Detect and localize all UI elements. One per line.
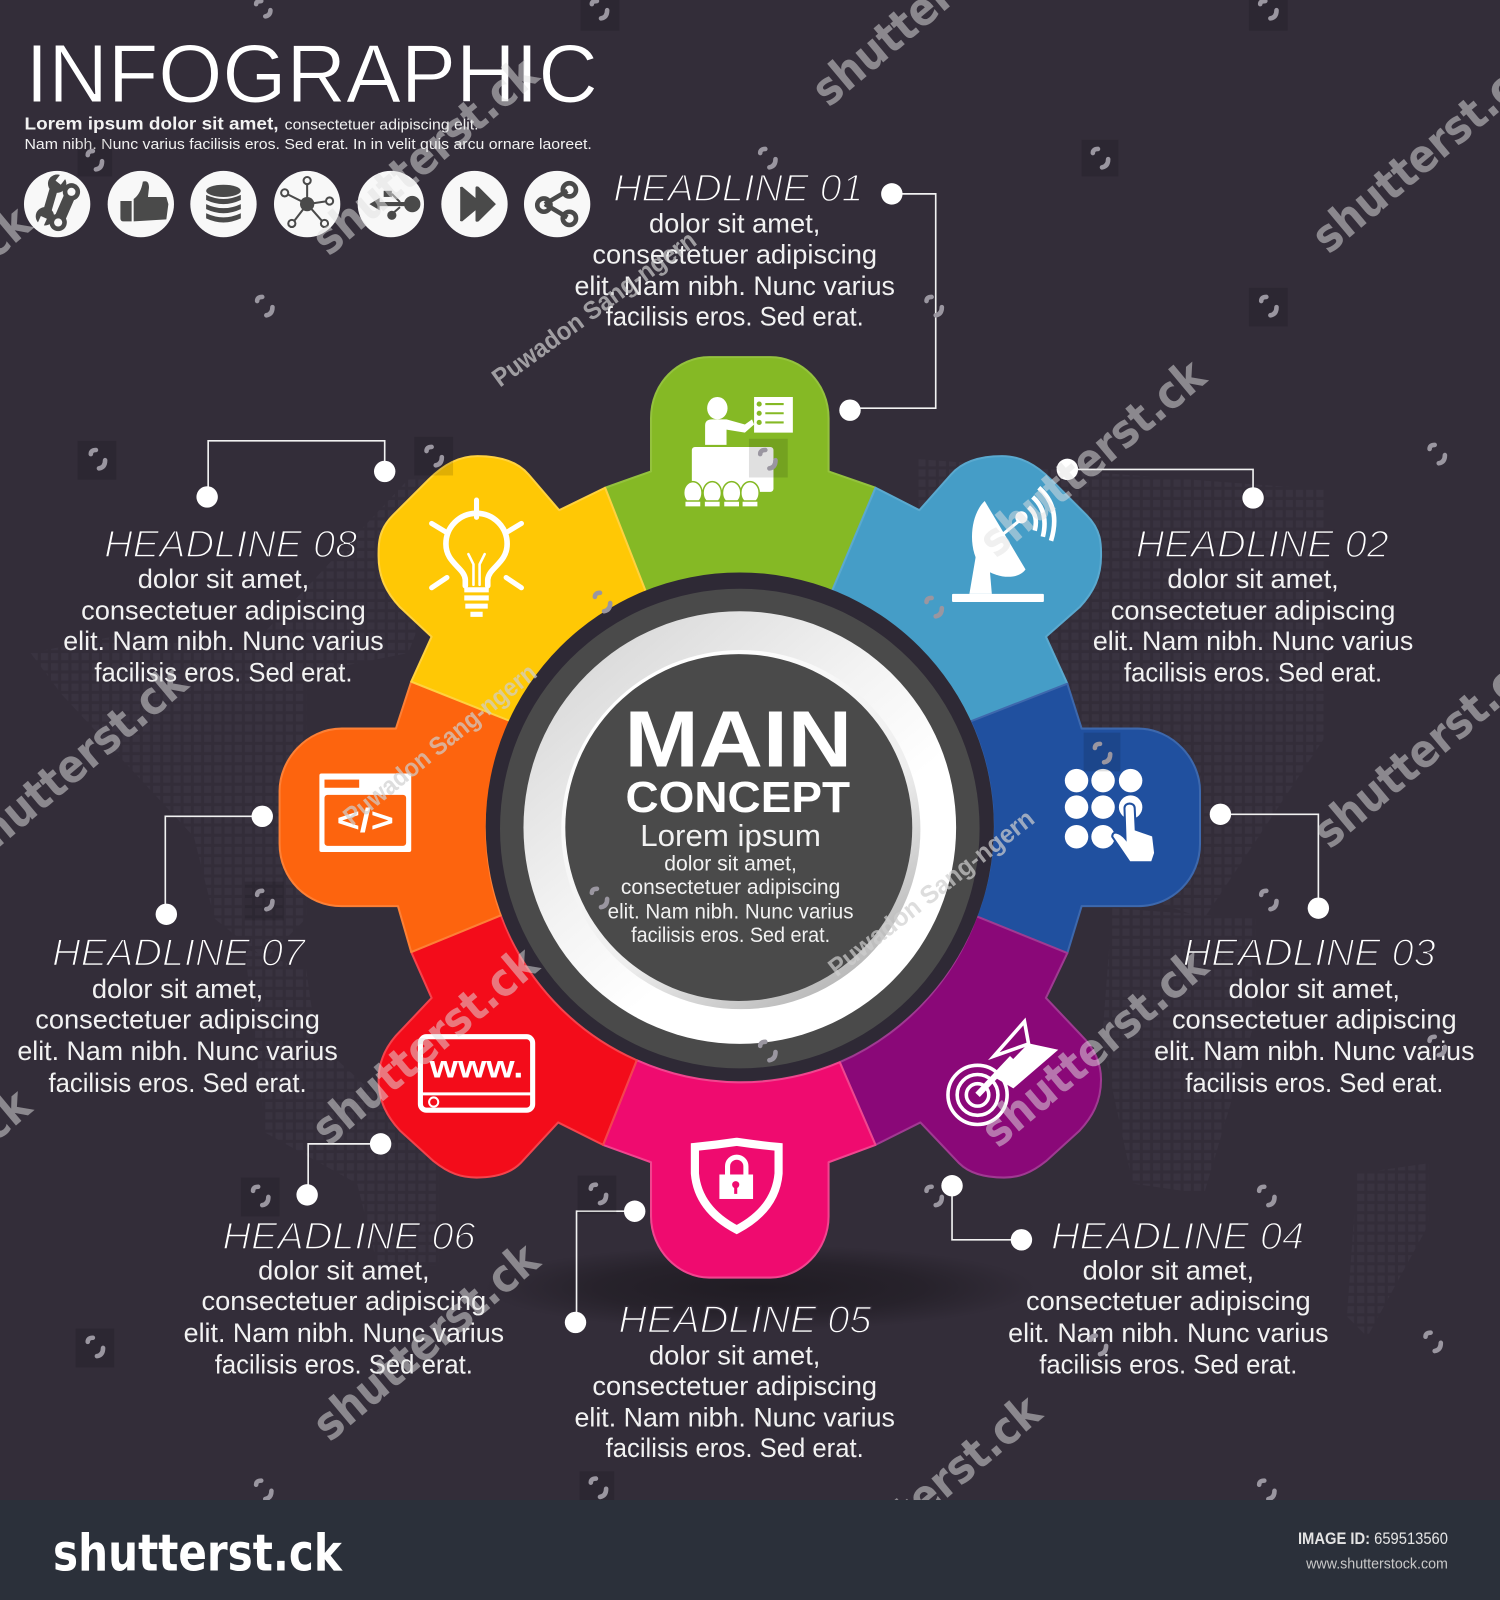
text block: headline 04: elit. Nam nibh. Nunc varius — [1008, 1318, 1329, 1348]
gear shadow — [485, 1245, 1036, 1331]
text block: headline 05: dolor sit amet, — [649, 1340, 820, 1370]
icon: share — [524, 171, 590, 237]
text block: headline 07 — [17, 931, 338, 1098]
text block: headline 07: dolor sit amet, — [92, 974, 263, 1004]
segment 01 green — [605, 357, 876, 592]
main concept text: CONCEPT — [626, 773, 850, 822]
text block: headline 06: elit. Nam nibh. Nunc varius — [184, 1318, 504, 1348]
text block: headline 03: elit. Nam nibh. Nunc varius — [1154, 1036, 1474, 1066]
icon: thumbs up — [108, 171, 174, 237]
subtitle text: Lorem ipsum dolor sit amet, — [24, 114, 279, 134]
text block: headline 01: consectetuer adipiscing — [592, 239, 877, 269]
icon: tools — [24, 171, 90, 237]
footer bar — [0, 1500, 1500, 1600]
watermarks: Puwadon Sang-ngern — [338, 659, 542, 831]
text block: headline 05: facilisis eros. Sed erat. — [606, 1433, 864, 1463]
text block: headline 02: HEADLINE 02 — [1136, 523, 1389, 565]
icon: database — [190, 171, 257, 237]
connector 01 — [839, 183, 936, 421]
text block: headline 03: dolor sit amet, — [1229, 974, 1400, 1004]
subtitle text: Nam nibh. Nunc varius facilisis eros. Sed erat. In in velit quis arcu ornare laoreet. — [24, 136, 592, 153]
watermarks: shutterst.ck — [968, 347, 1217, 568]
text block: headline 04: HEADLINE 04 — [1051, 1215, 1304, 1257]
main concept text: facilisis eros. Sed erat. — [631, 924, 830, 947]
subtitle text — [24, 114, 592, 153]
icon row — [24, 171, 590, 237]
text block: headline 02: dolor sit amet, — [1167, 564, 1339, 594]
watermarks: Puwadon Sang-ngern — [487, 226, 702, 393]
watermarks: shutterst.ck — [970, 937, 1219, 1157]
text block: headline 02: elit. Nam nibh. Nunc varius — [1093, 626, 1413, 656]
connector 08 — [196, 441, 395, 508]
text block: headline 04: consectetuer adipiscing — [1026, 1286, 1311, 1316]
title: INFOGRAPHIC — [26, 27, 598, 120]
icon: code window: </> — [337, 803, 394, 840]
text block: headline 04 — [1008, 1215, 1329, 1379]
text block: headline 03: facilisis eros. Sed erat. — [1185, 1068, 1443, 1098]
connector 02 — [1057, 459, 1264, 509]
watermarks: shutterst.ck — [804, 1383, 1052, 1600]
connector 03 — [1210, 804, 1329, 919]
text block: headline 06: consectetuer adipiscing — [202, 1286, 486, 1316]
icon: code window — [319, 773, 411, 852]
panel: gear with eight coloured segments — [280, 357, 1200, 1278]
text block: headline 06: dolor sit amet, — [258, 1256, 430, 1286]
text block: headline 02 — [1093, 523, 1413, 688]
text block: headline 05: elit. Nam nibh. Nunc varius — [574, 1403, 895, 1433]
text block: headline 05 — [574, 1299, 895, 1463]
subtitle text: consectetuer adipiscing elit. — [285, 118, 479, 134]
connector 07 — [156, 806, 273, 925]
icon: shield with padlock — [695, 1142, 779, 1230]
text block: headline 03 — [1154, 931, 1474, 1098]
segment 02 blue — [832, 456, 1101, 721]
watermarks: shutterst.ck — [301, 935, 549, 1155]
text block: headline 07: HEADLINE 07 — [52, 931, 307, 973]
footer logo: shutterst.ck — [53, 1524, 343, 1583]
text block: headline 06 — [184, 1215, 504, 1379]
icon: target and arrow — [948, 1021, 1057, 1124]
text block: headline 03: HEADLINE 03 — [1183, 931, 1436, 973]
connector 06 — [296, 1133, 391, 1206]
main concept text: elit. Nam nibh. Nunc varius — [608, 900, 854, 923]
text block: headline 01: facilisis eros. Sed erat. — [606, 302, 864, 332]
icon: light bulb — [432, 500, 521, 614]
text block: headline 01: elit. Nam nibh. Nunc varius — [574, 271, 895, 301]
icon: www browser — [420, 1037, 533, 1110]
text block: headline 08: consectetuer adipiscing — [81, 595, 366, 625]
text block: headline 02: consectetuer adipiscing — [1111, 595, 1395, 625]
text block: headline 06: facilisis eros. Sed erat. — [215, 1349, 473, 1379]
segment 06 red — [379, 915, 637, 1178]
segment 04 purple — [840, 916, 1101, 1178]
segment 05 pink — [603, 1060, 876, 1278]
main concept text: Lorem ipsum — [640, 819, 821, 853]
connector 05 — [565, 1201, 645, 1333]
text block: headline 08: facilisis eros. Sed erat. — [94, 658, 353, 688]
text block: headline 01: HEADLINE 01 — [613, 167, 863, 209]
icon: fast forward — [441, 171, 508, 237]
text block: headline 05: consectetuer adipiscing — [592, 1371, 877, 1401]
text block: headline 03: consectetuer adipiscing — [1172, 1005, 1457, 1035]
icon: keypad with pointing hand — [1065, 769, 1155, 862]
text block: headline 08: dolor sit amet, — [138, 564, 309, 594]
segment 08 yellow — [379, 456, 646, 721]
text block: headline 07: facilisis eros. Sed erat. — [48, 1068, 307, 1098]
watermarks: Puwadon Sang-ngern — [823, 804, 1040, 982]
text block: headline 05: HEADLINE 05 — [618, 1299, 872, 1341]
text block: headline 06: HEADLINE 06 — [222, 1215, 476, 1257]
text block: headline 07: elit. Nam nibh. Nunc varius — [17, 1036, 338, 1066]
main concept text: dolor sit amet, — [664, 852, 797, 875]
connector 04 — [941, 1175, 1032, 1251]
text block: headline 08: elit. Nam nibh. Nunc varius — [63, 626, 384, 656]
text block: headline 07: consectetuer adipiscing — [35, 1005, 320, 1035]
central hub — [486, 572, 994, 1081]
segment 03 navy — [970, 684, 1200, 953]
text block: headline 08 — [63, 523, 384, 688]
main concept text: MAIN — [624, 694, 852, 783]
footer image id: IMAGE ID: 659513560 — [1298, 1530, 1448, 1548]
text block: headline 01: dolor sit amet, — [649, 209, 820, 239]
watermarks: shutterst.ck — [301, 45, 549, 266]
footer url: www.shutterstock.com — [1305, 1556, 1448, 1572]
text block: headline 02: facilisis eros. Sed erat. — [1124, 658, 1382, 688]
icon: usb symbol — [358, 171, 424, 237]
text block: headline 04: dolor sit amet, — [1083, 1256, 1254, 1286]
icon: presenter and audience — [684, 397, 793, 507]
segment 07 orange — [280, 682, 511, 952]
text block: headline 08: HEADLINE 08 — [104, 523, 357, 565]
icon: satellite dish — [952, 488, 1054, 602]
text block: headline 04: facilisis eros. Sed erat. — [1039, 1349, 1297, 1379]
icon: www browser: www. — [428, 1049, 523, 1085]
watermarks: shutterst.ck — [302, 1231, 550, 1451]
icon: network hub — [274, 171, 340, 237]
main concept text — [608, 694, 854, 947]
main concept text: consectetuer adipiscing — [621, 876, 840, 899]
text block: headline 01 — [574, 167, 895, 332]
world map dots — [31, 459, 1429, 1337]
